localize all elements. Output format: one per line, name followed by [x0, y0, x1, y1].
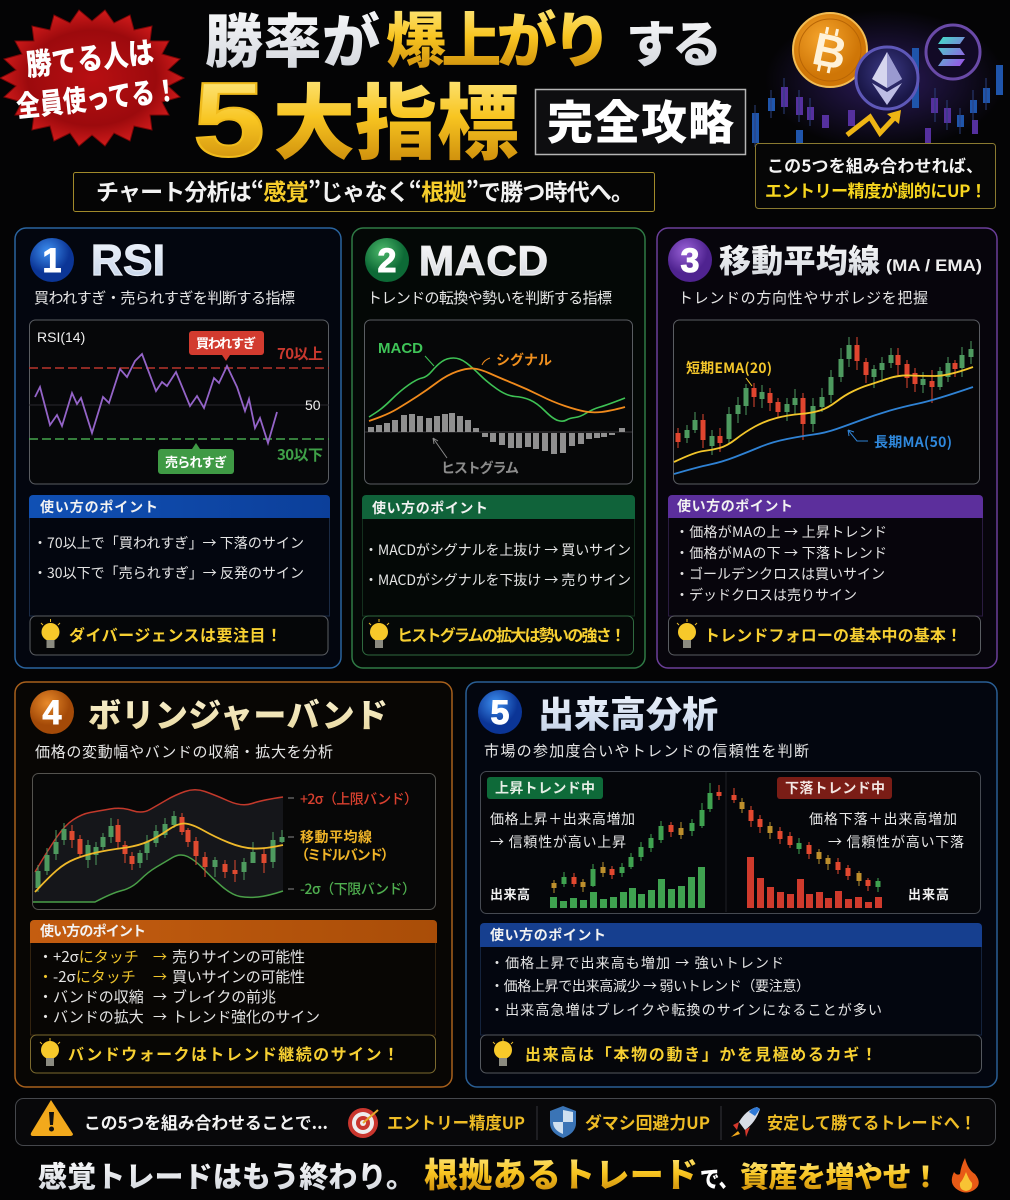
number 4: 4: [43, 694, 62, 732]
closing message: 根拠あるトレード: [424, 1148, 698, 1197]
tip: バンドウォークはトレンド継続のサイン！: [68, 1041, 399, 1065]
usage points: 使い方のポイント: [372, 498, 488, 518]
usage points: ・70以上で「買われすぎ」→ 下落のサイン: [33, 533, 304, 553]
icon: shield: [550, 1106, 576, 1138]
badge: uptrend: 上昇トレンド中: [495, 778, 595, 798]
usage points: [668, 495, 983, 616]
summary bar: [16, 1098, 996, 1146]
number 5: 5: [491, 694, 509, 732]
chart: candles with moving averages: 短期EMA(20): [686, 358, 772, 378]
panel: moving averages: [657, 228, 997, 668]
summary bar: この5つを組み合わせることで...: [84, 1109, 328, 1134]
subtitle box: チャート分析は“感覚”じゃなく“根拠”で勝つ時代へ。: [96, 173, 634, 207]
panel: MACD: [352, 228, 645, 668]
number 4: [30, 690, 74, 734]
heading: volume: 出来高分析: [538, 686, 718, 738]
tip: [30, 616, 328, 655]
badge: winners use them: 勝てる人は: [24, 28, 156, 85]
panel: Bollinger bands: [15, 682, 452, 1087]
chart: Bollinger bands: -2σ（下限バンド）: [300, 879, 416, 899]
usage points: →: [153, 987, 167, 1007]
chart: candles with moving averages: [674, 320, 980, 484]
usage points: ・-2σにタッチ: [38, 966, 136, 987]
background candles: crypto art: [752, 10, 1005, 150]
heading: MACD: MACD: [419, 237, 548, 284]
chart: Bollinger bands: +2σ（上限バンド）: [300, 789, 418, 809]
usage points: ・30以下で「売られすぎ」→ 反発のサイン: [33, 563, 304, 583]
chart: Bollinger bands: 移動平均線: [300, 827, 372, 847]
icon: bitcoin coin: B: [808, 22, 851, 80]
chart: MACD: [364, 320, 632, 484]
heading: Bollinger: ボリンジャーバンド: [88, 689, 388, 737]
usage points: ・価格がMAの上 → 上昇トレンド: [675, 522, 887, 542]
summary bar: 安定して勝てるトレードへ！: [767, 1109, 976, 1134]
number 5: [478, 690, 522, 734]
icon: bulb: [677, 619, 697, 648]
title tag: complete guide: 完全攻略: [547, 87, 734, 153]
panel: volume analysis: [466, 682, 997, 1087]
chart: volume: → 信頼性が高い上昇: [490, 832, 626, 852]
callout: combine the five: [756, 144, 996, 208]
usage points: ・価格がMAの下 → 下落トレンド: [675, 543, 887, 563]
description: トレンドの方向性やサポレジを把握: [678, 287, 928, 308]
label: oversold: [158, 443, 234, 474]
usage points: 使い方のポイント: [677, 496, 793, 516]
icon: bulb: [41, 619, 60, 648]
chart: volume: 価格上昇＋出来高増加: [490, 809, 635, 829]
label: overbought: [189, 331, 264, 361]
tip: ダイバージェンスは要注目！: [69, 622, 282, 646]
heading: RSI: RSI: [91, 236, 165, 285]
badge: winners use them: 全員使ってる！: [14, 67, 180, 126]
icon: bulb: [493, 1038, 513, 1066]
number 1: [30, 238, 74, 282]
usage points: →: [153, 947, 167, 967]
usage points: 使い方のポイント: [490, 925, 606, 945]
usage points: [29, 495, 330, 616]
usage points: [480, 923, 982, 1035]
usage points: ・バンドの収縮: [38, 986, 144, 1007]
badge: downtrend: 下落トレンド中: [785, 778, 885, 798]
number 2: 2: [378, 242, 396, 280]
usage points: ブレイクの前兆: [172, 986, 276, 1007]
icon: bulb: [40, 1038, 60, 1066]
usage points: トレンド強化のサイン: [172, 1006, 320, 1027]
tip: [30, 1035, 436, 1073]
number 1: 1: [43, 242, 61, 280]
chart: RSI line: 30以下: [277, 444, 323, 465]
closing message: 感覚トレードはもう終わり。: [38, 1154, 415, 1196]
chart: volume: → 信頼性が高い下落: [828, 832, 964, 852]
usage points: ・MACDがシグナルを下抜け → 売りサイン: [364, 570, 631, 590]
tip: [668, 616, 980, 655]
usage points: 使い方のポイント: [40, 921, 146, 941]
chart: RSI line: RSI(14): [37, 329, 85, 345]
label: overbought: 買われすぎ: [196, 333, 256, 352]
description: 市場の参加度合いやトレンドの信頼性を判断: [484, 740, 809, 761]
icon: rising arrow: [847, 110, 901, 135]
number 3: 3: [681, 242, 699, 280]
title line two: five indicators: 大指標: [273, 57, 519, 176]
heading: moving average: [719, 236, 982, 282]
icon: ethereum coin: [856, 47, 918, 109]
icon: rocket: [731, 1107, 760, 1137]
tip: [362, 616, 634, 655]
chart: MACD: MACD: [378, 340, 423, 357]
closing message: 資産を増やせ！: [740, 1154, 940, 1196]
title line one: する: [626, 5, 722, 77]
chart: Bollinger bands: （ミドルバンド）: [295, 845, 395, 865]
icon: warning triangle: [31, 1100, 73, 1136]
description: 価格の変動幅やバンドの収縮・拡大を分析: [35, 741, 333, 762]
usage points: ・デッドクロスは売りサイン: [675, 585, 857, 605]
badge: winners use them: [0, 10, 184, 146]
icon: bitcoin coin: [793, 13, 867, 87]
icon: bulb: [369, 619, 389, 648]
chart: RSI line: 70以上: [277, 343, 323, 364]
tip: トレンドフォローの基本中の基本！: [704, 622, 962, 646]
usage points: ・MACDがシグナルを上抜け → 買いサイン: [364, 540, 631, 560]
icon: flame: [952, 1158, 979, 1192]
chart: RSI line: 50: [305, 397, 321, 413]
tip: [480, 1035, 982, 1073]
closing message: [38, 1148, 979, 1197]
description: 買われすぎ・売られすぎを判断する指標: [34, 287, 295, 308]
icon: target: [348, 1108, 378, 1138]
chart: MACD: シグナル: [496, 350, 552, 370]
usage points: →: [153, 1007, 167, 1027]
heading: moving average: 移動平均線: [719, 236, 880, 282]
title line one: [205, 0, 722, 80]
usage points: →: [153, 967, 167, 987]
usage points: ・バンドの拡大: [38, 1006, 144, 1027]
icon: solana coin: [926, 25, 980, 79]
summary bar: エントリー精度UP: [387, 1109, 525, 1134]
usage points: ・価格上昇で出来高も増加 → 強いトレンド: [490, 953, 784, 973]
tip: 出来高は「本物の動き」かを見極めるカギ！: [525, 1041, 877, 1065]
usage points: 売りサインの可能性: [172, 946, 305, 967]
callout: combine the five: エントリー精度が劇的にUP！: [765, 177, 987, 202]
chart: Bollinger bands: [32, 774, 436, 910]
number 2: [365, 238, 409, 282]
summary bar: ダマシ回避力UP: [585, 1109, 710, 1134]
chart: volume: [480, 772, 980, 914]
number 3: [668, 238, 712, 282]
chart: MACD: ヒストグラム: [441, 458, 519, 478]
label: oversold: 売られすぎ: [165, 452, 227, 471]
usage points: 使い方のポイント: [40, 497, 158, 517]
tip: ヒストグラムの拡大は勢いの強さ！: [397, 622, 626, 646]
chart: RSI line: [29, 320, 329, 484]
title line two: five indicators: 5: [193, 61, 265, 179]
heading: moving average: (MA / EMA): [886, 256, 982, 275]
usage points: ・出来高急増はブレイクや転換のサインになることが多い: [490, 1000, 882, 1020]
chart: volume: 出来高: [490, 884, 530, 903]
usage points: [30, 920, 437, 1035]
usage points: [362, 495, 635, 616]
usage points: ・ゴールデンクロスは買いサイン: [675, 564, 885, 584]
description: トレンドの転換や勢いを判断する指標: [367, 287, 612, 308]
usage points: 買いサインの可能性: [172, 966, 305, 987]
chart: volume: 出来高: [908, 884, 949, 903]
callout: combine the five: この5つを組み合わせれば、: [767, 152, 983, 177]
usage points: ・価格上昇で出来高減少 → 弱いトレンド（要注意）: [490, 976, 810, 996]
usage points: ・+2σにタッチ: [38, 946, 139, 967]
chart: volume: 価格下落＋出来高増加: [809, 809, 957, 829]
closing message: で、: [700, 1160, 738, 1194]
chart: candles with moving averages: 長期MA(50): [874, 432, 952, 452]
panel: RSI: [15, 228, 341, 668]
